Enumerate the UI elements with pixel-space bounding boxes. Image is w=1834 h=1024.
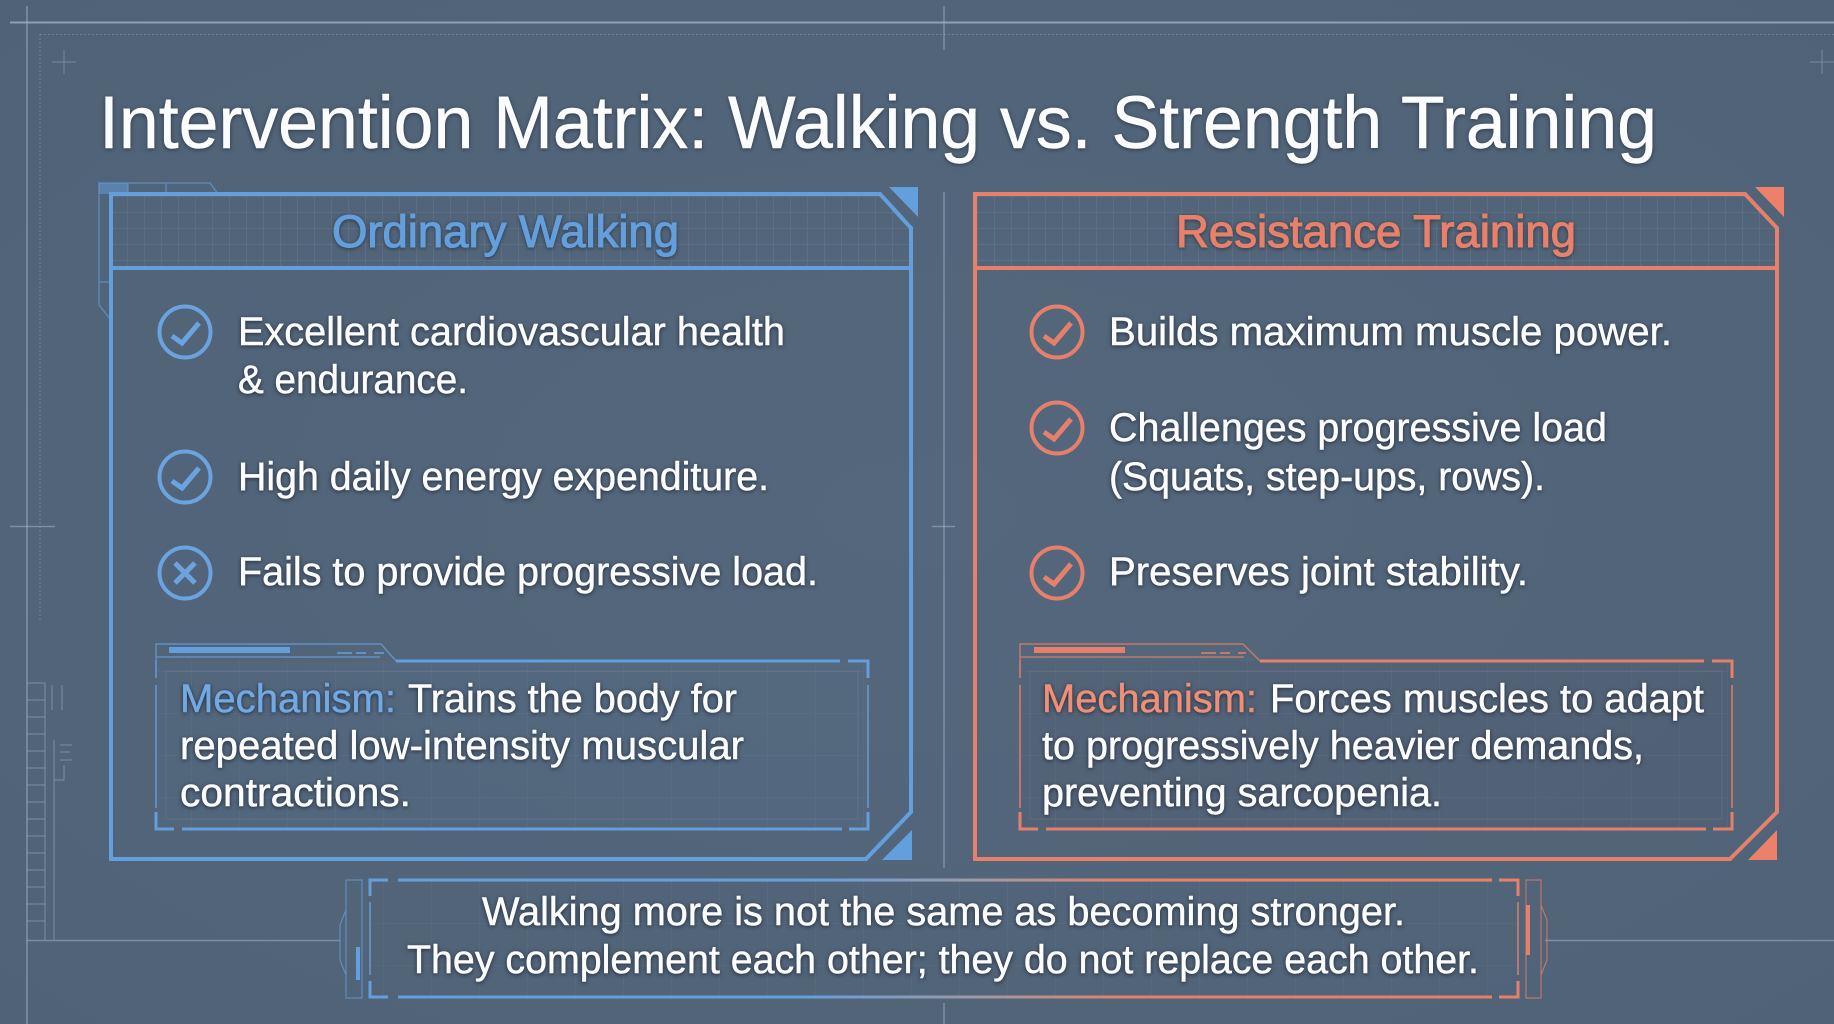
icon: check	[1032, 402, 1082, 454]
corner triangles	[882, 187, 918, 860]
panel: ordinary walking	[99, 183, 918, 860]
icon: check	[160, 452, 210, 502]
panel outline	[111, 194, 911, 859]
item text: Builds maximum muscle power.	[1109, 310, 1672, 354]
mechanism box: Forces muscles to adapt	[1270, 677, 1704, 721]
icon: check	[1032, 306, 1082, 358]
heading: Ordinary Walking	[332, 206, 679, 257]
panel outline	[975, 194, 1777, 859]
item text: Challenges progressive load	[1109, 406, 1607, 450]
item text continued: & endurance.	[238, 358, 468, 402]
mechanism box: repeated low-intensity muscular	[180, 724, 744, 768]
icon: check	[160, 306, 210, 358]
mechanism box: preventing sarcopenia.	[1042, 771, 1442, 815]
icon: cross	[160, 548, 210, 598]
left ruler decoration	[27, 683, 72, 940]
corner triangles	[1748, 187, 1784, 860]
callout text: Walking more is not the same as becoming stronger.	[482, 890, 1405, 934]
mechanism box: contractions.	[180, 771, 411, 815]
header grid	[111, 194, 911, 268]
mechanism text: Mechanism:	[180, 677, 396, 721]
item text continued: (Squats, step-ups, rows).	[1109, 455, 1545, 499]
tab fill	[99, 183, 128, 194]
title: Intervention Matrix: Walking vs. Strength Training	[99, 81, 1657, 164]
item text: Preserves joint stability.	[1109, 550, 1528, 594]
panel backing tab	[99, 183, 218, 320]
mechanism box	[1020, 644, 1732, 829]
heading: Resistance Training	[1176, 206, 1576, 257]
right side bracket	[1526, 880, 1547, 998]
mechanism box	[156, 644, 868, 829]
callout: conclusion: They complement each other; they do not replace each other.	[407, 938, 1479, 982]
item text: High daily energy expenditure.	[238, 455, 769, 499]
header grid	[975, 194, 1777, 268]
mechanism box: to progressively heavier demands,	[1042, 724, 1644, 768]
mechanism box: Trains the body for	[408, 677, 737, 721]
mechanism text: Mechanism:	[1042, 677, 1257, 721]
callout: conclusion	[340, 880, 1547, 998]
item text: Excellent cardiovascular health	[238, 310, 785, 354]
icon: check	[1032, 548, 1082, 598]
left side bracket	[340, 880, 362, 998]
callout frame	[398, 880, 1492, 997]
item text: Fails to provide progressive load.	[238, 550, 818, 594]
panel: resistance training	[975, 187, 1784, 860]
